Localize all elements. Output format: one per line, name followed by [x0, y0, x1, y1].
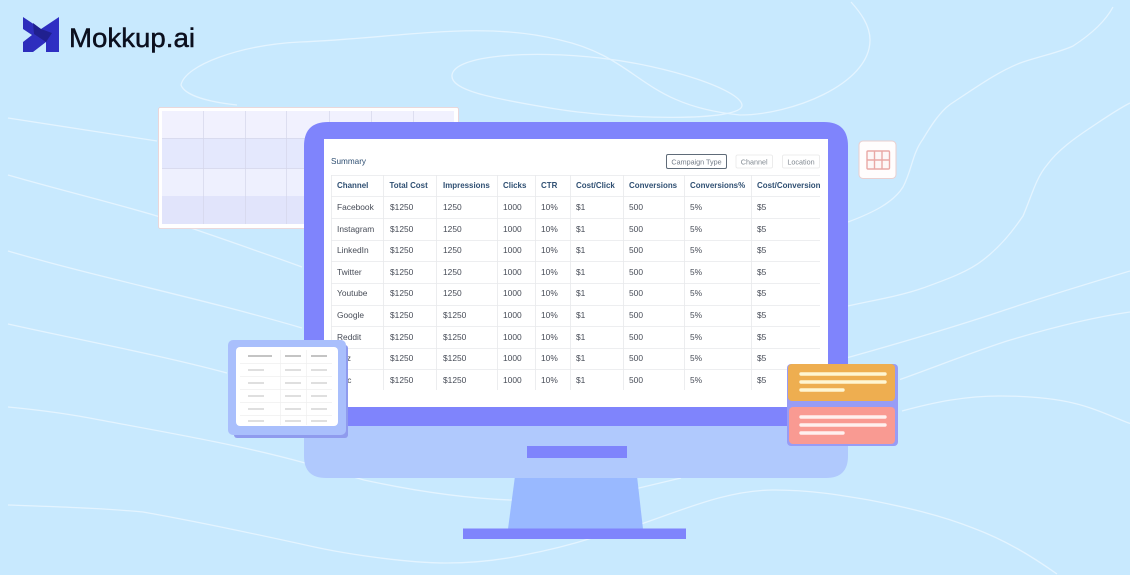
- table rows: 1000: [503, 267, 522, 277]
- icon: Mokkup logo mark: [23, 17, 59, 52]
- table rows: $5: [757, 267, 767, 277]
- table header: Cost/Click: [576, 181, 615, 190]
- table rows: 1000: [503, 245, 522, 255]
- table rows: $1: [576, 245, 586, 255]
- icon: table button: [859, 141, 896, 178]
- monitor stand: [508, 476, 643, 529]
- table rows: 500: [629, 245, 643, 255]
- table rows: $1: [576, 202, 586, 212]
- table header: Clicks: [503, 181, 527, 190]
- table rows: LinkedIn: [337, 245, 369, 255]
- table rows: $1250: [390, 375, 414, 385]
- table rows: 5%: [690, 245, 703, 255]
- table rows: 500: [629, 353, 643, 363]
- table rows: $5: [757, 224, 767, 234]
- table rows: 1000: [503, 288, 522, 298]
- note: red: [789, 407, 895, 444]
- table rows: 1000: [503, 375, 522, 385]
- summary table: [331, 154, 821, 390]
- table header: CTR: [541, 181, 558, 190]
- table rows: Youtube: [337, 288, 368, 298]
- table rows: 10%: [541, 202, 558, 212]
- table rows: 5%: [690, 267, 703, 277]
- table rows: $1250: [390, 224, 414, 234]
- table rows: $5: [757, 202, 767, 212]
- table rows: Instagram: [337, 224, 374, 234]
- filter: Location: [782, 155, 820, 168]
- table header: [337, 181, 821, 190]
- table rows: 1000: [503, 202, 522, 212]
- table rows: 10%: [541, 267, 558, 277]
- table rows: 10%: [541, 332, 558, 342]
- monitor base: [463, 528, 686, 539]
- table rows: 500: [629, 288, 643, 298]
- table rows: $1250: [390, 267, 414, 277]
- table rows: 10%: [541, 224, 558, 234]
- table rows: Google: [337, 310, 364, 320]
- table rows: 1250: [443, 267, 462, 277]
- table rows: Xyz: [337, 353, 351, 363]
- mini table card: [228, 340, 348, 438]
- table rows: $5: [757, 353, 767, 363]
- table rows: 5%: [690, 353, 703, 363]
- table rows: $1250: [443, 375, 467, 385]
- filter: Channel: Channel: [741, 158, 768, 166]
- table rows: $5: [757, 288, 767, 298]
- table rows: $1: [576, 267, 586, 277]
- table rows: $1250: [390, 245, 414, 255]
- table rows: 500: [629, 310, 643, 320]
- monitor frame: [304, 122, 848, 426]
- table rows: [337, 202, 767, 385]
- note: orange: [788, 364, 895, 401]
- table rows: 1000: [503, 332, 522, 342]
- table rows: Abc: [337, 375, 351, 385]
- table rows: $1: [576, 224, 586, 234]
- table rows: 1250: [443, 224, 462, 234]
- table rows: $1250: [443, 353, 467, 363]
- table rows: $1250: [443, 332, 467, 342]
- table rows: 10%: [541, 245, 558, 255]
- table rows: 1250: [443, 245, 462, 255]
- table rows: $5: [757, 332, 767, 342]
- table rows: 500: [629, 267, 643, 277]
- table rows: $1250: [390, 353, 414, 363]
- table rows: 10%: [541, 375, 558, 385]
- table rows: 500: [629, 202, 643, 212]
- table header: Conversions%: [690, 181, 745, 190]
- table rows: $5: [757, 375, 767, 385]
- logo: [23, 17, 195, 53]
- background spreadsheet panel: [158, 108, 458, 228]
- table rows: 5%: [690, 375, 703, 385]
- table header: Channel: [337, 181, 368, 190]
- table rows: 1250: [443, 202, 462, 212]
- table header: Conversions: [629, 181, 678, 190]
- table rows: 1250: [443, 288, 462, 298]
- table header: Total Cost: [390, 181, 428, 190]
- table rows: Facebook: [337, 202, 375, 212]
- table rows: $1250: [390, 202, 414, 212]
- table rows: 1000: [503, 224, 522, 234]
- table rows: $1: [576, 310, 586, 320]
- table rows: 500: [629, 224, 643, 234]
- filter: Location: Location: [787, 158, 815, 166]
- table rows: $1: [576, 332, 586, 342]
- monitor screen: [324, 139, 828, 407]
- table rows: $1250: [390, 310, 414, 320]
- table rows: 5%: [690, 224, 703, 234]
- table rows: 5%: [690, 202, 703, 212]
- table rows: 5%: [690, 288, 703, 298]
- monitor slot: [527, 446, 627, 458]
- table rows: Reddit: [337, 332, 362, 342]
- table rows: 10%: [541, 288, 558, 298]
- filter: Channel: [736, 155, 772, 168]
- table title: Summary: [331, 157, 367, 166]
- table rows: 10%: [541, 310, 558, 320]
- table rows: 5%: [690, 332, 703, 342]
- monitor: [304, 122, 848, 539]
- table rows: $1: [576, 288, 586, 298]
- table rows: $5: [757, 310, 767, 320]
- monitor chin: [304, 420, 848, 478]
- table rows: $1250: [390, 332, 414, 342]
- table rows: 500: [629, 332, 643, 342]
- table header: Impressions: [443, 181, 490, 190]
- filter: Campaign Type: [666, 154, 726, 168]
- table rows: $1250: [443, 310, 467, 320]
- table rows: 1000: [503, 310, 522, 320]
- table rows: $1: [576, 353, 586, 363]
- filter: Campaign Type: Campaign Type: [671, 158, 722, 166]
- notes card: [787, 364, 898, 446]
- table header: Cost/Conversion: [757, 181, 821, 190]
- table rows: 500: [629, 375, 643, 385]
- table rows: $5: [757, 245, 767, 255]
- table rows: 10%: [541, 353, 558, 363]
- table rows: $1250: [390, 288, 414, 298]
- logo wordmark: Mokkup.ai: [69, 23, 195, 53]
- table rows: Twitter: [337, 267, 362, 277]
- table rows: 1000: [503, 353, 522, 363]
- table rows: $1: [576, 375, 586, 385]
- table rows: 5%: [690, 310, 703, 320]
